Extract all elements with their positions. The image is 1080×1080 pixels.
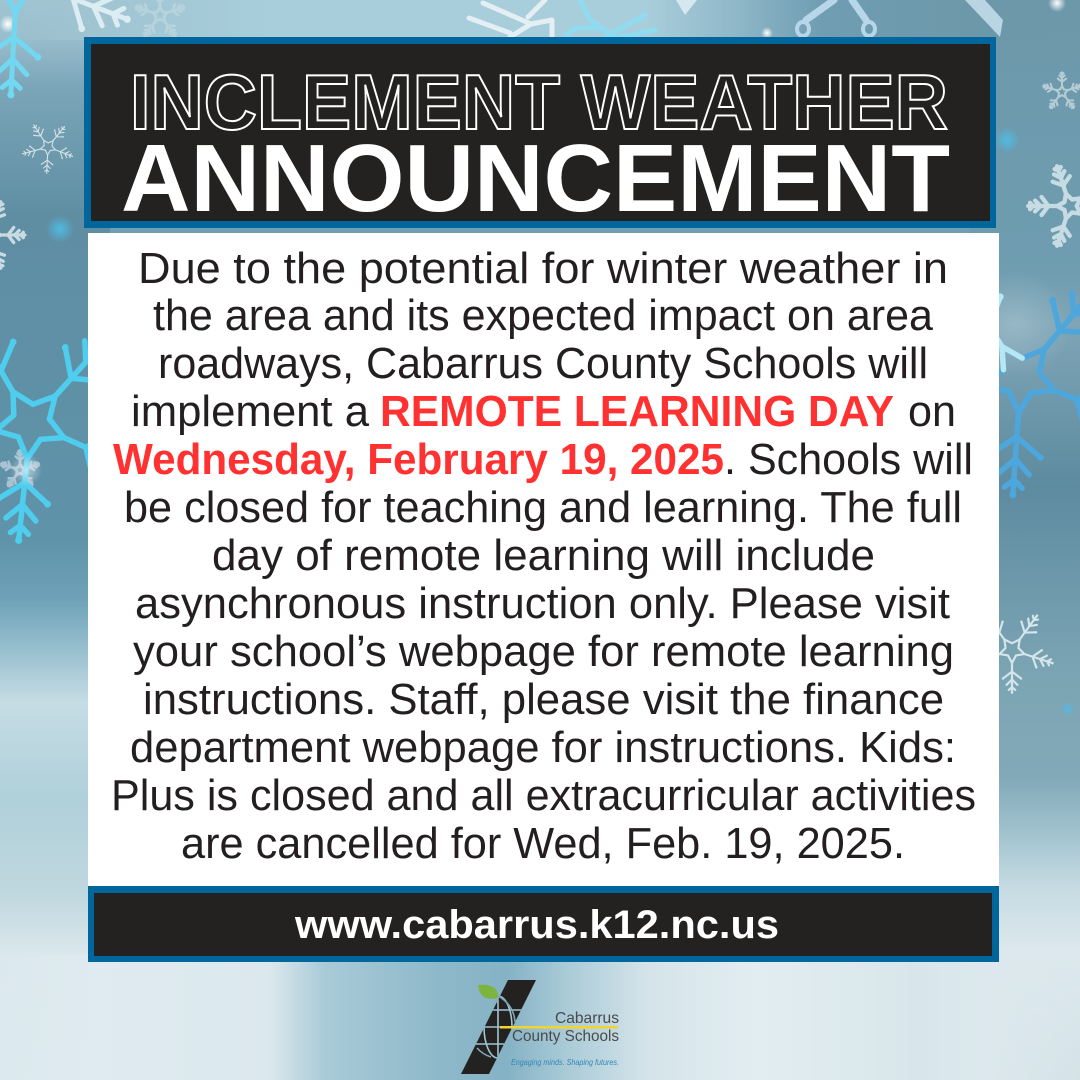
text block: announcement message: are cancelled for Wed, Feb. 19, 2025. <box>181 820 905 868</box>
logo: Cabarrus County Schools <box>461 980 619 1074</box>
logo text: Cabarrus: Cabarrus <box>555 1010 619 1027</box>
text block: announcement message: day of remote learning will include <box>212 532 875 580</box>
logo text: County Schools: County Schools <box>512 1028 619 1045</box>
panel: title banner <box>84 37 996 232</box>
icon: faint snowflake top left <box>133 0 187 40</box>
panel: website footer bar <box>88 886 999 962</box>
text block: announcement message: be closed for teaching and learning. The full <box>124 484 962 532</box>
icon: snowflake fragments along the top edge <box>469 0 1003 37</box>
logo text: tagline: Engaging minds. Shaping futures. <box>511 1057 619 1067</box>
icon: white snowflake lower right <box>967 609 1057 694</box>
text block: announcement message: roadways, Cabarrus County Schools will <box>158 340 928 388</box>
text block: announcement message: your school’s webpage for remote learning <box>133 628 954 676</box>
text block: announcement message <box>111 245 976 868</box>
icon: white snowflake right <box>1026 161 1080 251</box>
text block: announcement message: asynchronous instruction only. Please visit <box>135 580 950 628</box>
icon: snowflake left edge <box>0 198 26 272</box>
icon: green leaf <box>478 985 498 999</box>
text block: announcement message: . Schools will <box>724 436 973 484</box>
yellow rule <box>500 1026 618 1028</box>
icon: cyan snowflake top left <box>0 0 147 105</box>
icon: small white snowflake left <box>19 120 77 175</box>
icon: white snowflake top right <box>1041 71 1080 112</box>
icon: large cyan snowflake left <box>0 296 167 557</box>
heading: inclement weather (outlined): INCLEMENT WEATHER <box>130 58 948 146</box>
text: website url: www.cabarrus.k12.nc.us <box>294 903 779 947</box>
text block: announcement message: instructions. Staff, please visit the finance <box>143 676 944 724</box>
icon: faint snowflake behind left flake <box>0 449 41 490</box>
text block: announcement message: Wednesday, February 19, 2025 <box>113 436 724 484</box>
text block: announcement message: REMOTE LEARNING DAY <box>380 388 894 436</box>
panel: announcement body <box>88 233 999 887</box>
icon: large blue snowflake right <box>888 254 1080 507</box>
text block: announcement message: Due to the potential for winter weather in <box>138 245 948 293</box>
text block: announcement message: on <box>908 388 956 436</box>
text block: announcement message: Plus is closed and all extracurricular activities <box>111 772 976 820</box>
text block: announcement message: implement a <box>131 388 370 436</box>
icon: slanted bar with globe <box>461 980 536 1074</box>
heading: announcement: ANNOUNCEMENT <box>121 125 950 232</box>
text block: announcement message: the area and its expected impact on area <box>153 292 934 340</box>
text block: announcement message: department webpage for instructions. Kids: <box>130 724 956 772</box>
